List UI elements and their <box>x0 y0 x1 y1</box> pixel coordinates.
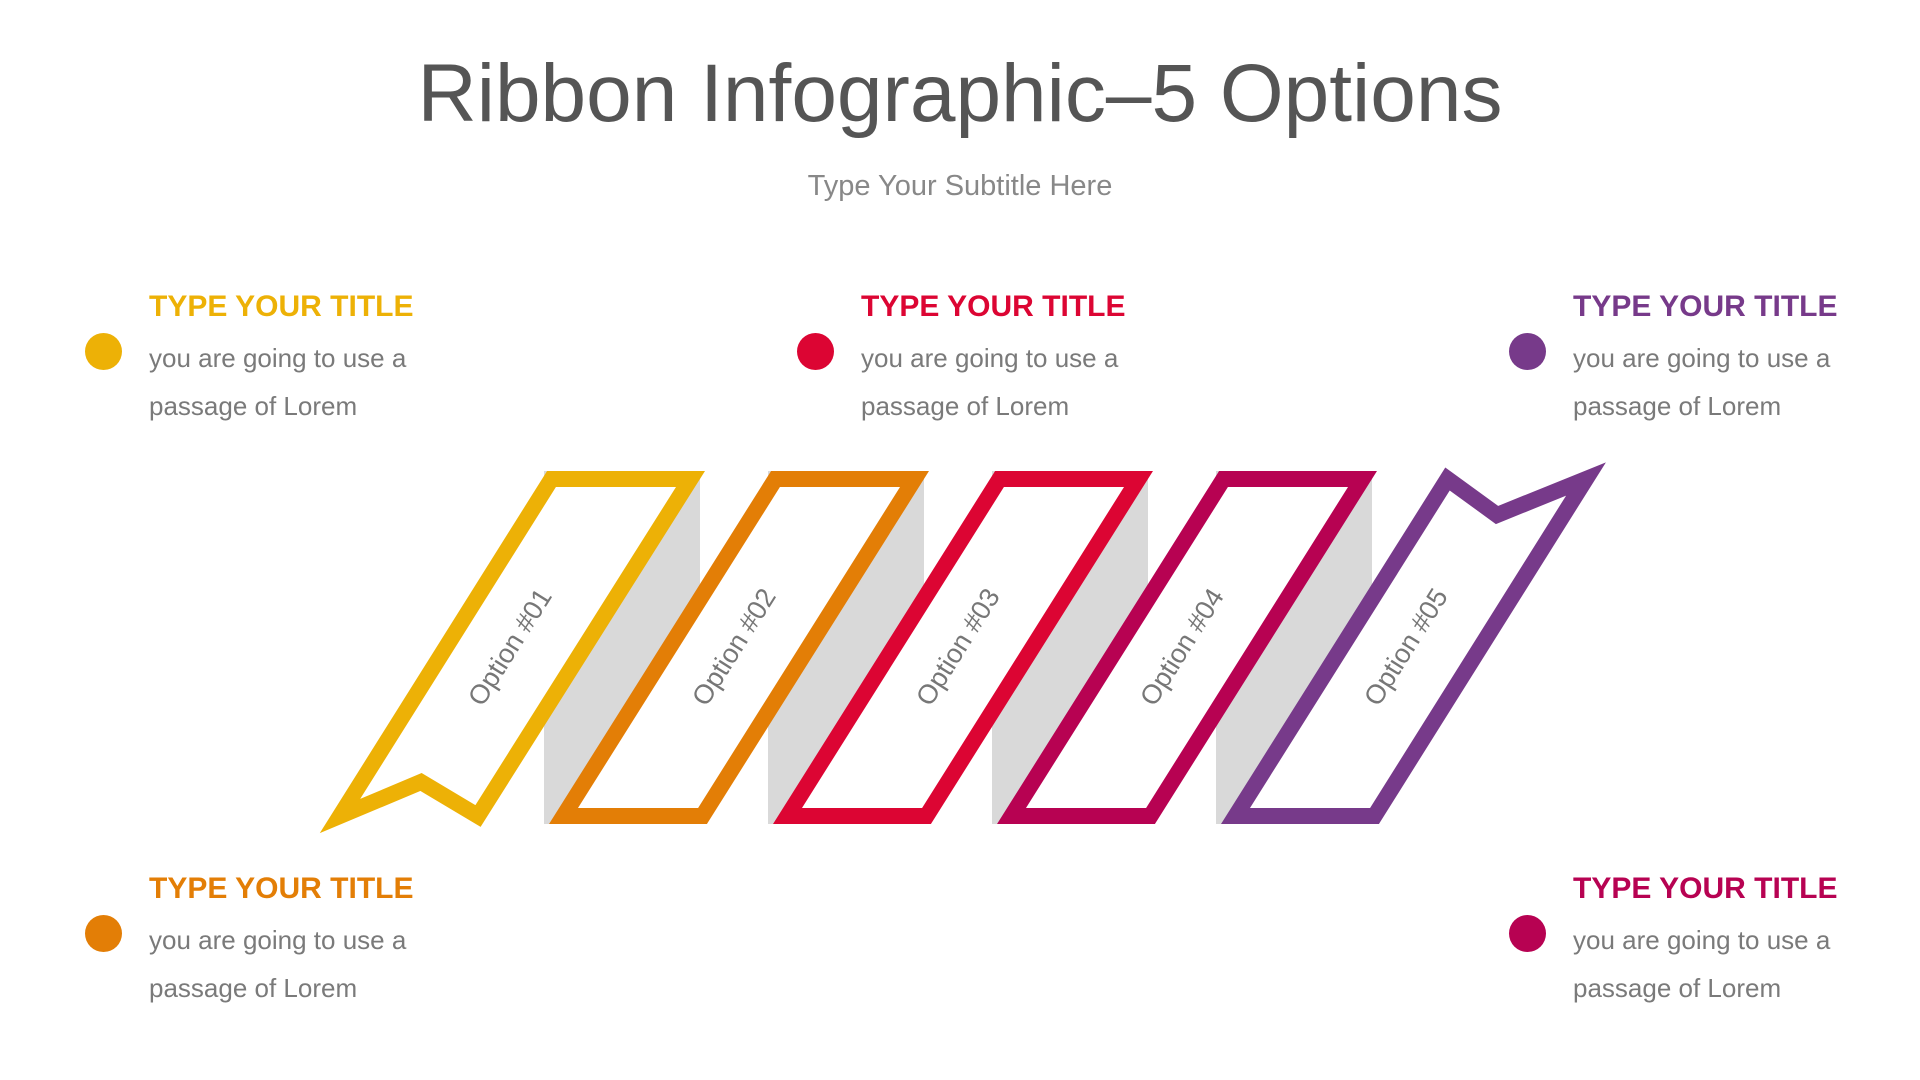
block: top middle: TYPE YOUR TITLE <box>861 290 1125 323</box>
block: top left: TYPE YOUR TITLE <box>149 290 413 323</box>
ribbon 2 <box>564 479 914 816</box>
block: top middle <box>797 290 1125 421</box>
title: Ribbon Infographic–5 Options <box>418 48 1502 139</box>
ribbon 4: Option #04 <box>1134 583 1230 711</box>
block: bottom right <box>1509 872 1837 1003</box>
block: bottom right: you are going to use a <box>1573 925 1830 955</box>
ribbon 3 <box>788 479 1138 816</box>
block: bottom right: passage of Lorem <box>1573 973 1781 1003</box>
block: top middle: passage of Lorem <box>861 391 1069 421</box>
block: bottom left <box>85 872 413 1003</box>
block: bottom left: you are going to use a <box>149 925 406 955</box>
ribbon 3: Option #03 <box>910 583 1006 711</box>
block: top middle: you are going to use a <box>861 343 1118 373</box>
block: top right: passage of Lorem <box>1573 391 1781 421</box>
ribbon 4 <box>1012 479 1362 816</box>
block: bottom left: passage of Lorem <box>149 973 357 1003</box>
ribbon 1: Option #01 <box>462 583 558 711</box>
block: top left <box>85 290 413 421</box>
block: bottom right: TYPE YOUR TITLE <box>1573 872 1837 905</box>
ribbon 2: Option #02 <box>686 583 782 711</box>
block: top right: TYPE YOUR TITLE <box>1573 290 1837 323</box>
subtitle: Type Your Subtitle Here <box>808 170 1112 202</box>
block: top left: passage of Lorem <box>149 391 357 421</box>
block: bottom left: TYPE YOUR TITLE <box>149 872 413 905</box>
block: top right: you are going to use a <box>1573 343 1830 373</box>
ribbon 1 <box>340 479 690 816</box>
block: top left: you are going to use a <box>149 343 406 373</box>
block: top right <box>1509 290 1837 421</box>
ribbon 5: Option #05 <box>1358 583 1454 711</box>
ribbon 5 <box>1236 479 1586 816</box>
